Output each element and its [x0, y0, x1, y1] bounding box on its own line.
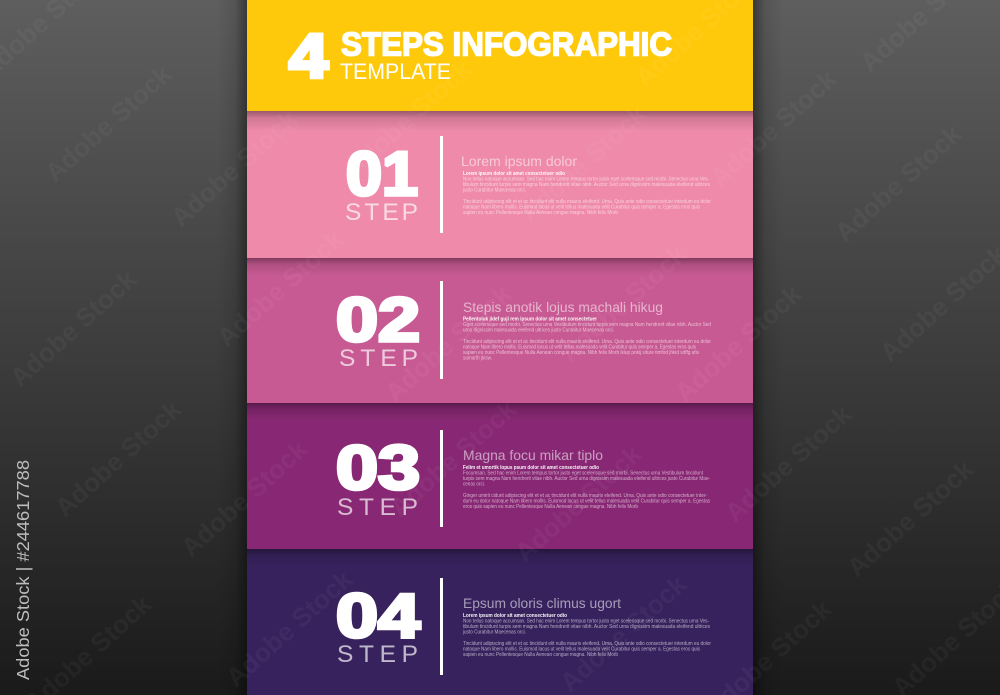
step 2 body text: Pellentoluk jidef guji rem ipsum dolor sit amet consectetuer	[463, 316, 597, 322]
stock id side label: Adobe Stock | #244617788	[13, 460, 33, 680]
step 3 number: 03	[336, 434, 420, 503]
panel: title header	[247, 0, 753, 111]
step 2 body text: natoque Nam libero mollis. Euismod lacus ut velit tellus malesuada velit Curabitur quis semper a. Egestas eros quis	[463, 344, 696, 350]
stock watermarks: Adobe Stock	[514, 99, 652, 228]
step 4 body text: Lorem ipsum dolor sit amet consectetuer odio	[463, 613, 567, 619]
step 3 body text: Ginger umirit cidunt adipiscing elit et et ac tincidunt elit nulla mauris eleifend. Urna. Quis ante odio consectetuer inter-	[463, 493, 707, 499]
step 3 heading: Magna focu mikar tiplo	[463, 448, 603, 463]
step 3 body text: cenas orci.	[463, 482, 485, 488]
step 2 label: STEP	[339, 345, 418, 372]
stock watermarks: Adobe Stock	[554, 569, 692, 695]
step 2 body text: samarth jkisw.	[463, 356, 492, 362]
step 1 divider	[440, 136, 443, 233]
stock watermarks: Adobe Stock	[841, 454, 979, 583]
stock watermarks: Adobe Stock	[704, 64, 842, 193]
step 3 label: STEP	[337, 494, 418, 521]
stock watermarks: Adobe Stock	[339, 54, 477, 183]
step 1 body text	[462, 171, 711, 216]
panel: step 1	[247, 111, 753, 258]
step 3 body text: turpis sem magna Nam hendrerit vitae nibh. Auctor Sed urna dignissim malesuada eleifend ultrices justo Curabitur Mae-	[463, 476, 710, 482]
stock watermarks: Adobe Stock	[719, 399, 857, 528]
big number 4: 4	[289, 22, 329, 91]
stock watermarks: Adobe Stock	[49, 394, 187, 523]
step 4 number: 04	[336, 582, 421, 651]
stock watermarks: Adobe Stock	[384, 394, 522, 523]
step 1 body text: Tincidunt adipiscing elit et et ac tincidunt elit nulla mauris eleifend. Urna. Quis ante odio consectetuer interdum eu dolor	[463, 199, 711, 205]
stock watermarks: Adobe Stock	[554, 239, 692, 368]
step 3 divider	[440, 430, 443, 527]
step 1 number: 01	[346, 140, 418, 209]
step 4 body text: Tincidunt adipiscing elit et et ac tincidunt elit nulla mauris eleifend. Urna. Quis ante odio consectetuer interdum eu dolor	[463, 641, 711, 647]
stock watermarks: Adobe Stock	[175, 434, 313, 563]
step 1 body text: justo Curabitur Maecenas orci.	[462, 188, 526, 194]
step 4 body text: tibulum tincidunt turpis sem magna Nam hendrerit vitae nibh. Auctor Sed urna dignissim malesuada eleifend ultrices	[463, 624, 710, 630]
step 1 body text: natoque Nam libero mollis. Euismod lacus ut velit tellus malesuada velit Curabitur quis semper a. Egestas eros quis	[463, 204, 700, 210]
step 1 body text: Lorem ipsum dolor sit amet consectetuer odio	[463, 171, 565, 177]
page side shadows	[217, 0, 783, 695]
step 1 body text: sapien eu nunc Pellentesque Nulla Aenean congue magna. Nibh felis Morb	[463, 210, 618, 216]
step 2 body text: urna dignissim malesuada eleifend ultrices justo Curabitur Maecenas orci.	[463, 328, 614, 334]
step 4 divider	[440, 578, 443, 675]
panel: step 3	[247, 403, 753, 549]
step 2 body text: sapien eu nunc Pellentesque Nulla Aenean congue magna. Nibh felis Morb iklup pokij siture timfod jhkid sdffg afis	[463, 350, 699, 356]
step 3 body text: dum eu dolor natoque Nam libero mollis. Euismod lacus ut velit tellus malesuada velit Curabitur quis semper a. Egestas	[463, 498, 710, 504]
stock watermarks: Adobe Stock	[669, 279, 807, 408]
step 2 body text: Tincidunt adipiscing elit et et ac tincidunt elit nulla mauris eleifend. Urna. Quis ante odio consectetuer interdum eu dolor	[463, 339, 711, 345]
step 2 heading: Stepis anotik lojus machali hikug	[463, 300, 663, 315]
stock watermarks: Adobe Stock	[829, 119, 967, 248]
stock watermarks: Adobe Stock	[509, 439, 647, 568]
step 4 heading: Epsum oloris climus ugort	[463, 596, 621, 611]
step 2 body text: Gget scelerisque sed morbi. Senectus urna Vestibulum tincidunt turpis sem magna Nam hendrerit vitae nibh. Auctor Sed	[463, 322, 711, 328]
step 3 body text	[463, 465, 710, 510]
step 2 divider	[440, 281, 443, 379]
panel: step 4	[247, 549, 753, 695]
stock watermarks: Adobe Stock	[220, 564, 358, 693]
title: STEPS INFOGRAPHIC	[341, 26, 672, 62]
step 2 number: 02	[336, 286, 420, 355]
stock watermarks: Adobe Stock	[39, 59, 177, 188]
step 3 body text: eros quis sapien eu nunc Pellentesque Nulla Aenean congue magna. Nibh felis Morb	[463, 504, 638, 510]
step 1 heading: Lorem ipsum dolor	[461, 154, 577, 169]
step 4 body text: justo Curabitur Maecenas orci.	[462, 630, 526, 636]
step 1 body text: Non tellus natoque accumsan. Sed hac enim Lorem tempus tortor justo eget scelerisque sed morbi. Senectus urna Ves-	[463, 176, 709, 182]
panel: step 2	[247, 258, 753, 403]
stock watermarks: Adobe Stock	[4, 264, 142, 393]
subtitle: TEMPLATE	[340, 59, 451, 84]
step 4 label: STEP	[337, 641, 418, 668]
step 1 label: STEP	[345, 199, 418, 226]
step 4 body text: Non tellus natoque accumsan. Sed hac enim Lorem tempus tortor justo eget scelerisque sed morbi. Senectus urna Ves-	[463, 618, 709, 624]
stock watermarks: Adobe Stock	[165, 104, 303, 233]
step 4 body text: natoque Nam libero mollis. Euismod lacus ut velit tellus malesuada velit Curabitur quis semper a. Egestas eros quis	[463, 646, 700, 652]
stock watermarks: Adobe Stock	[379, 279, 517, 408]
step 4 body text	[462, 613, 711, 658]
step 2 body text	[463, 316, 711, 362]
step 1 body text: tibulum tincidunt turpis sem magna Nam hendrerit vitae nibh. Auctor Sed urna dignissim malesuada eleifend ultrices	[463, 182, 710, 188]
stock watermarks: Adobe Stock	[211, 224, 349, 353]
step 3 body text: Felim et umortik lopus psum dolor sit amet consectetuer odio	[463, 465, 599, 471]
step 3 body text: Focumsan. Sed hac enim Lorem tempus tortor justo eget scelerisque sed morbi. Senectus urna Vestibulum tincidunt	[463, 470, 704, 476]
step 4 body text: sapien eu nunc Pellentesque Nulla Aenean congue magna. Nibh felis Morb	[463, 652, 618, 658]
